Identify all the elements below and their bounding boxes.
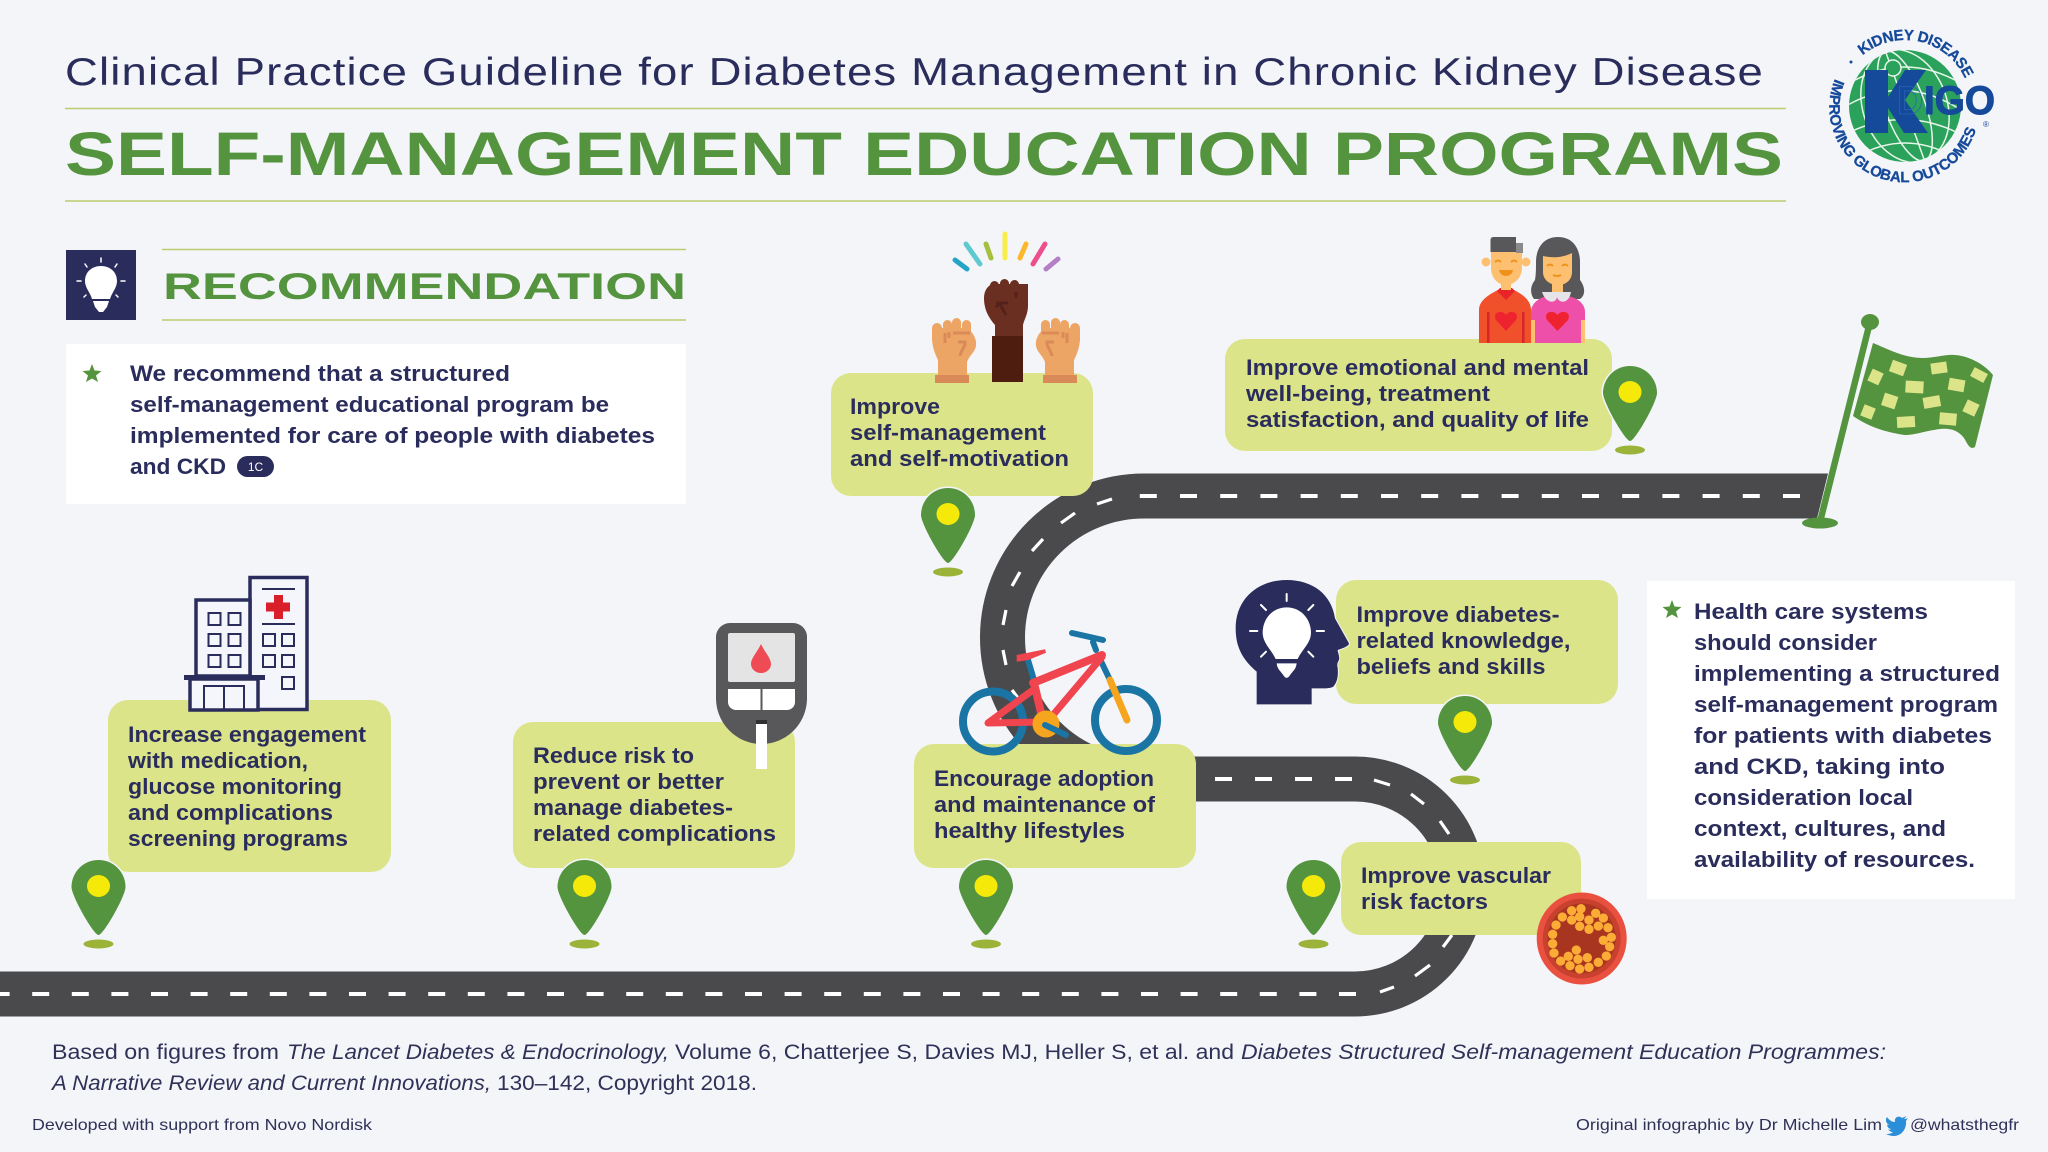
panel: self-management xyxy=(831,373,1093,496)
icon: twitter bird xyxy=(1886,1116,1908,1136)
logo: KDIGO: ® xyxy=(1983,120,1989,129)
logo: KDIGO: IMPROVING GLOBAL OUTCOMES xyxy=(1829,79,1976,182)
icon: raised fists xyxy=(932,234,1080,383)
panel: reduce risk: prevent or better xyxy=(533,769,724,794)
health care systems statement: self-management program xyxy=(1694,692,1998,717)
panel: reduce risk: manage diabetes- xyxy=(533,795,733,820)
logo: KDIGO: D xyxy=(1897,79,1923,123)
icon: checkered flag xyxy=(1802,314,1993,528)
panel: engagement: screening programs xyxy=(128,826,348,851)
panel: engagement xyxy=(108,700,391,872)
rays xyxy=(955,234,1058,269)
pin: reduce risk xyxy=(558,860,612,948)
logo: KDIGO: KIDNEY DISEASE xyxy=(1857,29,1974,78)
icon: star xyxy=(1662,600,1682,618)
panel: engagement: and complications xyxy=(128,800,333,825)
health care systems statement: and CKD, taking into xyxy=(1694,754,1945,779)
health care systems statement: implementing a structured xyxy=(1694,661,2000,686)
health care systems statement: Health care systems xyxy=(1694,599,1928,624)
panel: well-being: well-being, treatment xyxy=(1245,381,1491,406)
panel: vascular risk factors xyxy=(1341,842,1581,935)
panel: well-being: Improve emotional and mental xyxy=(1246,355,1589,380)
recommendation statement: We recommend that a structured xyxy=(130,361,510,386)
pin: knowledge xyxy=(1438,696,1492,784)
badge: grade 1C: 1C xyxy=(248,460,264,474)
panel: vascular risk factors: risk factors xyxy=(1361,889,1488,914)
health care systems statement: consideration local xyxy=(1694,785,1913,810)
icon: plaque in artery xyxy=(1537,892,1627,984)
citation text: Based on figures from xyxy=(52,1041,279,1064)
panel: healthy lifestyles: and maintenance of xyxy=(934,792,1156,817)
icon: glucose meter xyxy=(716,623,807,769)
icon: bicycle xyxy=(963,633,1157,752)
badge: grade 1C xyxy=(237,456,274,477)
infographic credit xyxy=(1576,1116,2020,1136)
panel: knowledge: beliefs and skills xyxy=(1356,654,1546,679)
health care systems statement: should consider xyxy=(1694,630,1877,655)
panel: engagement: with medication, xyxy=(127,748,308,773)
support credit: Developed with support from Novo Nordisk xyxy=(32,1117,373,1134)
health care systems statement xyxy=(1694,599,2000,872)
pin: self-management xyxy=(921,488,975,576)
panel: self-management: self-management xyxy=(850,420,1047,445)
citation text: Diabetes Structured Self-management Education Programmes: xyxy=(1241,1041,1886,1064)
icon: lightbulb square xyxy=(66,250,136,320)
panel: well-being xyxy=(1225,339,1612,451)
panel: knowledge: Improve diabetes- xyxy=(1356,602,1560,627)
pin: engagement xyxy=(72,860,126,948)
panel: knowledge xyxy=(1336,580,1618,704)
citation text xyxy=(50,1041,1886,1095)
pin: well-being xyxy=(1603,366,1657,454)
citation text: 130–142, Copyright 2018. xyxy=(497,1072,757,1095)
citation text: A Narrative Review and Current Innovations, xyxy=(50,1072,491,1095)
recommendation statement xyxy=(130,361,655,479)
icon: hospital xyxy=(184,578,307,710)
health care systems statement: for patients with diabetes xyxy=(1694,723,1992,748)
health care systems statement: context, cultures, and xyxy=(1694,816,1946,841)
panel: self-management: and self-motivation xyxy=(850,446,1069,471)
icon: star xyxy=(82,364,102,382)
panel: recommendation text xyxy=(66,344,686,504)
panel: reduce risk: related complications xyxy=(533,821,776,846)
title: clinical practice guideline: Clinical Practice Guideline for Diabetes Management in Chronic Kidney Disease xyxy=(65,51,1764,94)
infographic credit: Original infographic by Dr Michelle Lim xyxy=(1576,1117,1882,1134)
right fist xyxy=(1036,318,1080,383)
panel: engagement: glucose monitoring xyxy=(128,774,342,799)
citation text: The Lancet Diabetes & Endocrinology, xyxy=(287,1041,669,1064)
man xyxy=(1479,237,1531,343)
recommendation statement: implemented for care of people with diabetes xyxy=(130,423,655,448)
icon: head with lightbulb xyxy=(1236,580,1349,704)
panel: reduce risk: Reduce risk to xyxy=(533,743,694,768)
heading: self-management education programs: SELF-MANAGEMENT EDUCATION PROGRAMS xyxy=(65,120,1783,188)
pin: vascular xyxy=(1286,860,1340,948)
centre fist xyxy=(984,279,1028,382)
infographic credit: @whatsthegfr xyxy=(1910,1117,2020,1134)
panel: self-management: Improve xyxy=(850,394,940,419)
panel: healthy lifestyles: healthy lifestyles xyxy=(934,818,1125,843)
panel: engagement: Increase engagement xyxy=(128,722,367,747)
panel: reduce risk xyxy=(513,722,795,868)
panel: vascular risk factors: Improve vascular xyxy=(1361,863,1551,888)
panel: health care systems xyxy=(1647,581,2015,899)
panel: well-being: satisfaction, and quality of life xyxy=(1246,407,1589,432)
woman xyxy=(1531,237,1585,343)
pin: lifestyles xyxy=(959,860,1013,948)
health care systems statement: availability of resources. xyxy=(1694,847,1975,872)
heading: recommendation: RECOMMENDATION xyxy=(163,266,686,307)
panel: healthy lifestyles: Encourage adoption xyxy=(934,766,1154,791)
panel: knowledge: related knowledge, xyxy=(1356,628,1570,653)
citation text: Volume 6, Chatterjee S, Davies MJ, Heller S, et al. and xyxy=(675,1041,1234,1064)
left fist xyxy=(932,318,976,383)
logo: KDIGO: IGO xyxy=(1924,79,1995,123)
logo: KDIGO xyxy=(1829,29,1995,182)
recommendation statement: and CKD xyxy=(130,454,226,479)
icon: happy couple xyxy=(1479,237,1585,343)
recommendation statement: self-management educational program be xyxy=(130,392,609,417)
panel: healthy lifestyles xyxy=(914,744,1196,868)
road xyxy=(0,474,1828,994)
